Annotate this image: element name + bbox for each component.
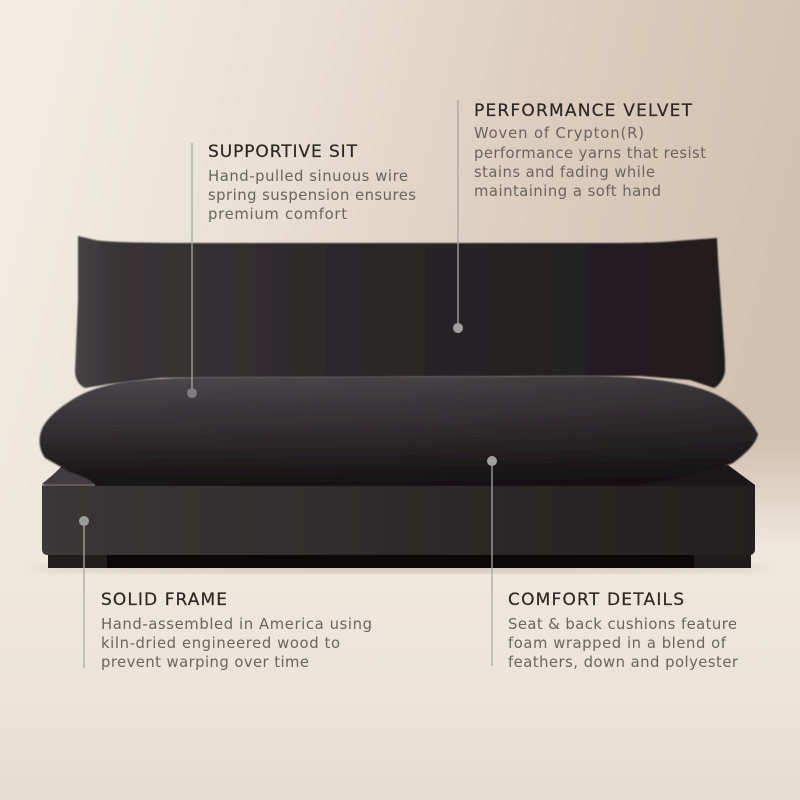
heading: COMFORT DETAILS: [508, 590, 684, 610]
description: Hand-assembled in America using: [101, 616, 372, 633]
description: maintaining a soft hand: [474, 183, 661, 200]
description: [474, 125, 706, 200]
floor shadow: [30, 565, 770, 571]
description: prevent warping over time: [101, 654, 309, 671]
description: kiln-dried engineered wood to: [101, 635, 340, 652]
heading: SOLID FRAME: [101, 590, 227, 610]
callout: comfort details: [487, 456, 739, 671]
back cushion: [75, 236, 725, 388]
callout: supportive sit: [187, 142, 416, 398]
description: Woven of Crypton(R): [474, 125, 644, 142]
seat cushion: [40, 376, 758, 485]
base frame: [42, 465, 755, 555]
leader line and dot: [453, 100, 463, 333]
heading: PERFORMANCE VELVET: [474, 101, 693, 121]
leader line and dot: [79, 516, 89, 668]
sofa feet and underside: [48, 553, 751, 568]
description: Hand-pulled sinuous wire: [208, 168, 408, 185]
leader line and dot: [187, 143, 197, 398]
heading: SUPPORTIVE SIT: [208, 142, 358, 162]
leader line and dot: [487, 456, 497, 666]
description: Seat & back cushions feature: [508, 616, 737, 633]
callout: solid frame: [79, 516, 372, 671]
description: premium comfort: [208, 206, 347, 223]
description: feathers, down and polyester: [508, 654, 739, 671]
description: [508, 616, 739, 671]
description: [208, 168, 416, 223]
description: stains and fading while: [474, 164, 655, 181]
description: spring suspension ensures: [208, 187, 416, 204]
callout: performance velvet: [453, 100, 706, 333]
description: foam wrapped in a blend of: [508, 635, 727, 652]
description: [101, 616, 372, 671]
description: performance yarns that resist: [474, 145, 706, 162]
sofa: [30, 236, 770, 571]
